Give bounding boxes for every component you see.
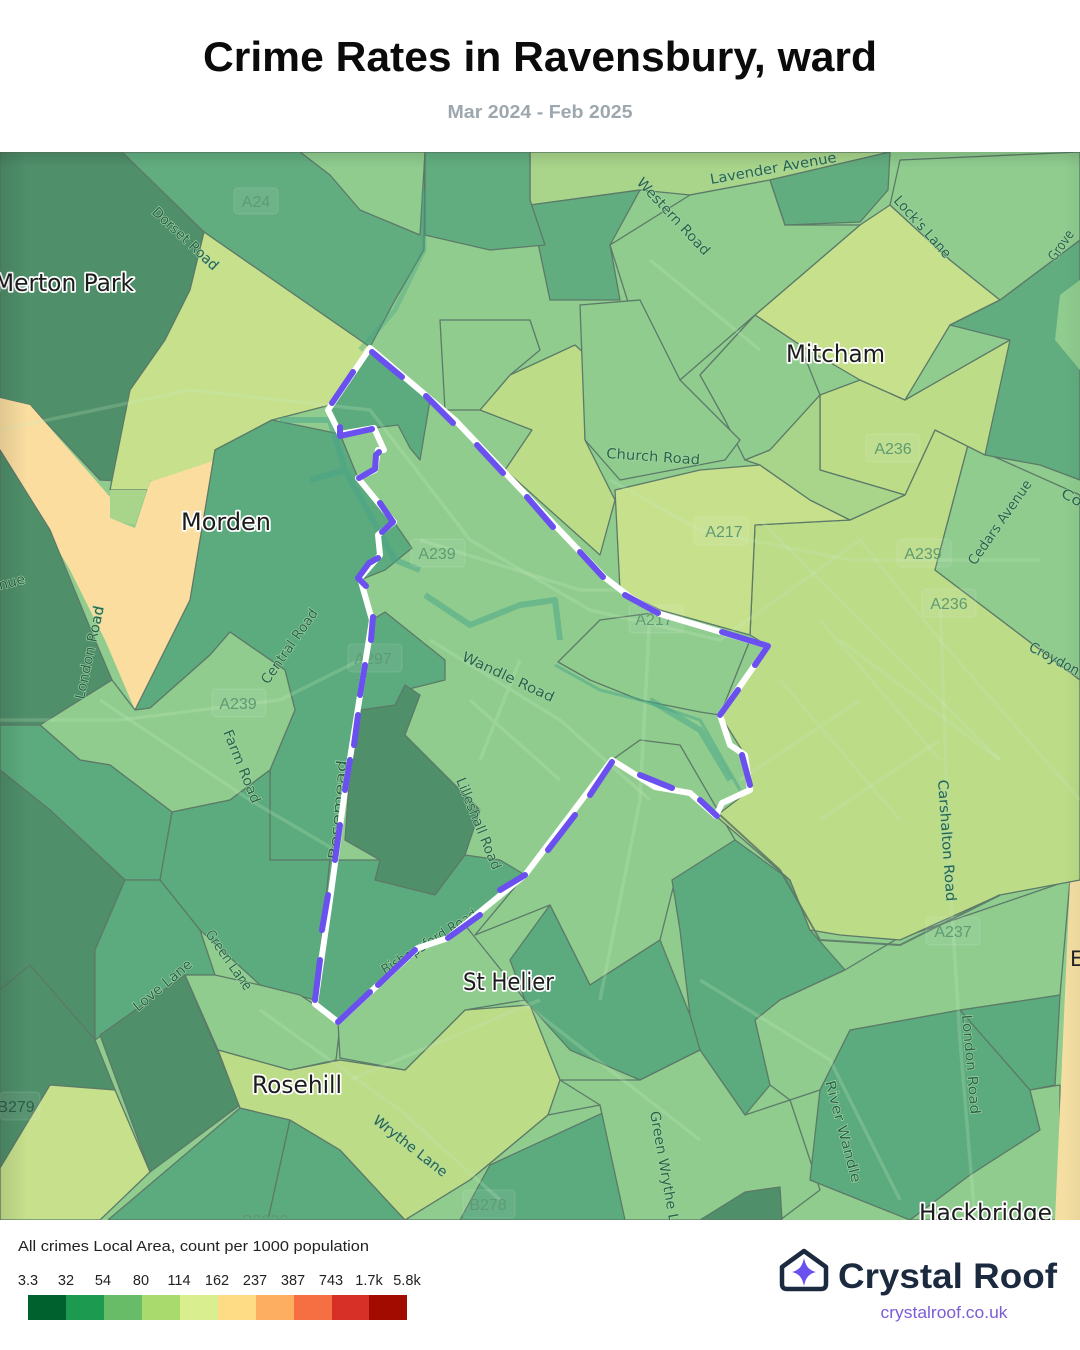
roads and streets <box>0 260 1080 1220</box>
street name labels: London Road <box>958 1014 983 1115</box>
street name labels: Wandle Road <box>459 649 557 706</box>
street name labels: Carshalton Road <box>934 779 958 902</box>
ward river area <box>558 612 750 715</box>
street name labels: Bishopsford Road <box>379 907 480 978</box>
road number labels: A237 <box>934 924 972 941</box>
street name labels: Farm Road <box>219 728 263 806</box>
road number labels: A239 <box>904 546 942 563</box>
street name labels: Cedars Avenue <box>965 477 1036 568</box>
map edge shading <box>0 152 1080 1220</box>
street name labels: Green Lane <box>202 927 255 994</box>
road number labels: A217 <box>705 524 743 541</box>
road number labels: A236 <box>874 441 912 458</box>
legend labels: 1.7k <box>355 1273 383 1289</box>
ward inner areas <box>328 348 430 460</box>
legend labels: 237 <box>243 1273 267 1289</box>
place name labels: Mitcham <box>786 340 885 368</box>
street name labels: River Wandle <box>821 1079 864 1184</box>
road number labels: A239 <box>418 546 456 563</box>
street name labels: Wrythe Lane <box>370 1113 450 1181</box>
street name labels: Western Road <box>633 175 713 259</box>
website: crystalroof.co.uk <box>880 1304 1008 1322</box>
legend labels: 80 <box>133 1273 149 1289</box>
road number labels: A24 <box>242 194 270 211</box>
street name labels: Rosemead <box>326 759 351 860</box>
legend title: All crimes Local Area, count per 1000 population <box>18 1238 369 1255</box>
icon: house with star <box>782 1251 826 1289</box>
road number labels: A217 <box>635 612 673 629</box>
legend <box>18 1238 421 1320</box>
legend labels: 3.3 <box>18 1273 38 1289</box>
place name labels: Rosehill <box>252 1071 342 1099</box>
legend labels: 5.8k <box>393 1273 421 1289</box>
street name labels: Love Lane <box>130 957 196 1015</box>
legend labels: 114 <box>167 1273 191 1289</box>
subtitle: date range: Mar 2024 - Feb 2025 <box>448 102 632 122</box>
title: Crime Rates in Ravensbury, ward <box>203 33 877 80</box>
road number labels: A236 <box>930 596 968 613</box>
legend colour scale <box>28 1295 407 1320</box>
legend labels: 162 <box>205 1273 229 1289</box>
street name labels: Lavender Avenue <box>709 150 838 188</box>
street name labels: Green Wrythe L <box>646 1110 681 1223</box>
road number labels <box>0 194 972 1230</box>
street name labels <box>0 150 1080 1223</box>
place name labels: Morden <box>181 508 271 536</box>
street name labels: Central Road <box>258 606 322 687</box>
street name labels: Lock's Lane <box>890 193 954 262</box>
rivers and water <box>280 190 1000 945</box>
Mitcham south areas <box>716 430 1080 940</box>
logo: Crystal Roof <box>782 1251 1057 1322</box>
street name labels: Church Road <box>606 446 701 469</box>
legend labels: 32 <box>58 1273 74 1289</box>
street name labels: Dorset Road <box>148 204 221 274</box>
street name labels: London Road <box>72 605 108 701</box>
south and east areas <box>475 740 735 985</box>
road number labels: A239 <box>219 696 257 713</box>
legend labels: 54 <box>95 1273 111 1289</box>
place name labels: Hackbridge <box>919 1199 1052 1227</box>
strip east <box>1055 880 1080 1220</box>
logo wordmark: Crystal Roof <box>838 1257 1057 1296</box>
legend labels: 743 <box>319 1273 343 1289</box>
road shields <box>0 188 980 1218</box>
legend labels <box>18 1273 421 1289</box>
place name labels <box>0 269 1052 1227</box>
ward boundary: Ravensbury <box>315 348 768 1022</box>
road number labels: A297 <box>354 651 392 668</box>
place name labels: St Helier <box>463 968 554 996</box>
area polygons <box>0 152 1080 1220</box>
road number labels: B2230 <box>242 1213 288 1230</box>
street name labels: Lilleshall Road <box>452 776 504 872</box>
legend labels: 387 <box>281 1273 305 1289</box>
road number labels: B278 <box>469 1197 507 1214</box>
